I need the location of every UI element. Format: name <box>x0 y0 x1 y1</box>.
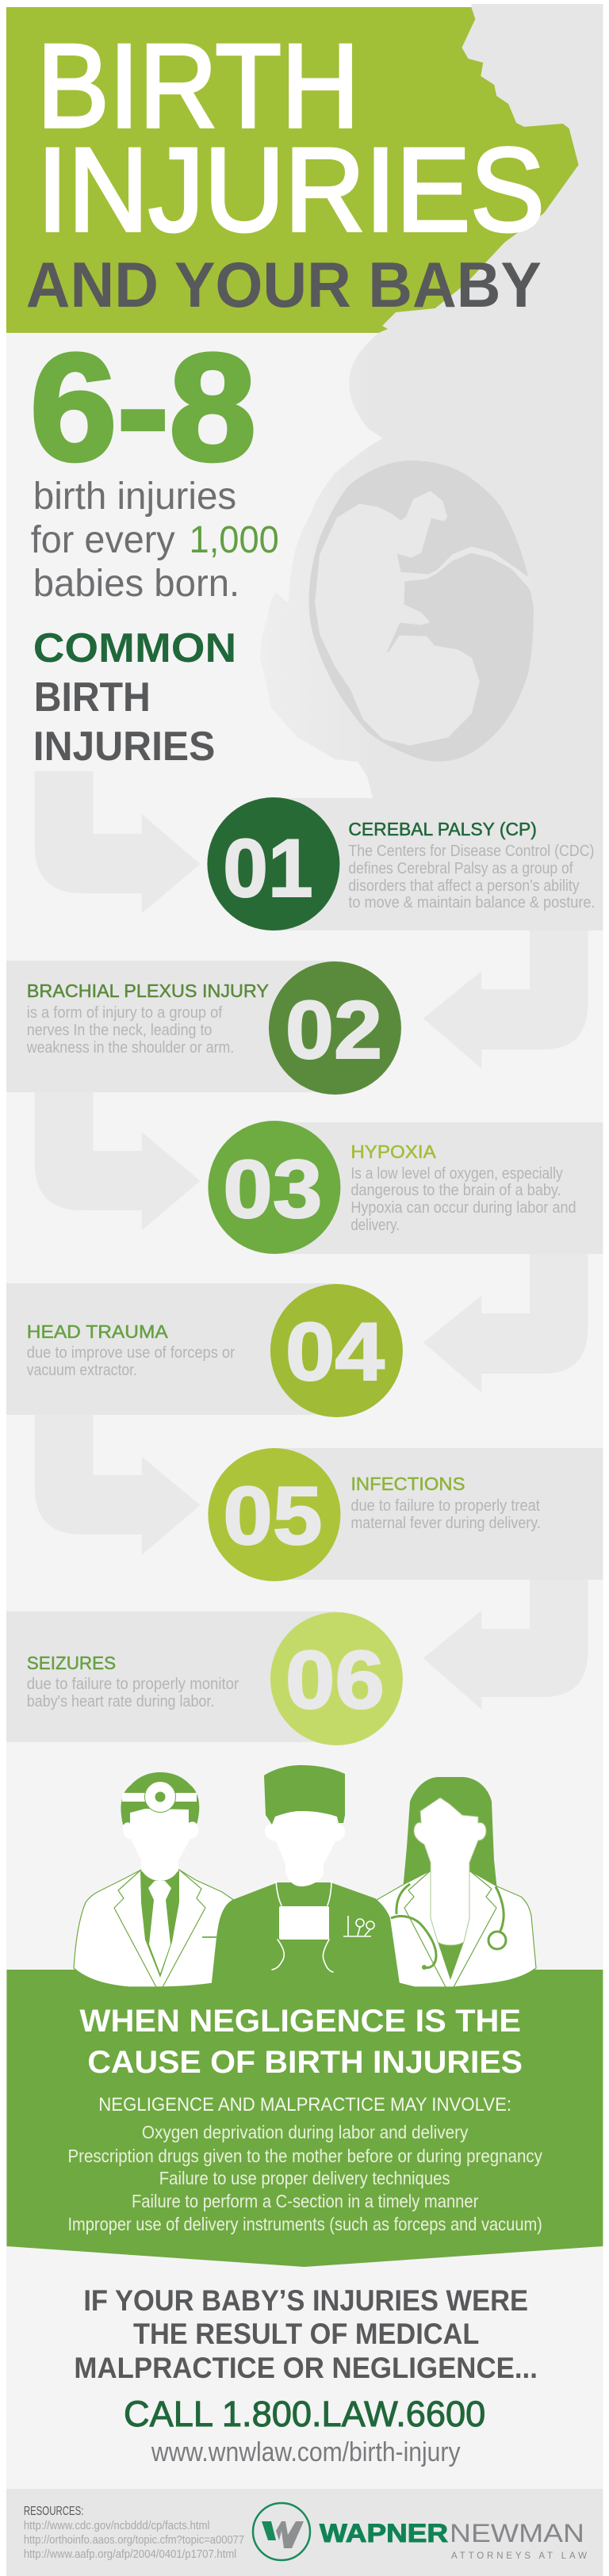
panel: brachial plexus injury: nerves In the neck, leading to <box>27 1022 212 1039</box>
call to action text <box>74 2284 538 2384</box>
heading: when negligence: CAUSE OF BIRTH INJURIES <box>87 2045 523 2080</box>
panel: hypoxia: 03 <box>223 1143 323 1235</box>
panel: hypoxia: HYPOXIA <box>350 1141 436 1162</box>
title: BIRTH <box>37 20 359 152</box>
nurse with stethoscope <box>377 1777 536 1987</box>
panel: brachial plexus injury: 02 <box>285 984 382 1076</box>
panel: head trauma: vacuum extractor. <box>27 1362 137 1379</box>
negligence list: Improper use of delivery instruments (such as forceps and vacuum) <box>67 2214 542 2234</box>
footer band <box>6 2489 603 2576</box>
resources <box>24 2505 244 2561</box>
statistic caption: 1,000 <box>190 519 279 561</box>
panel: infections: INFECTIONS <box>350 1473 465 1494</box>
panel: infections: maternal fever during delivery. <box>350 1515 541 1532</box>
arrow 5 <box>35 1415 200 1555</box>
panel: head trauma: 04 <box>285 1305 385 1397</box>
arrow 4 <box>423 1254 588 1393</box>
panel: hypoxia: Hypoxia can occur during labor and <box>350 1199 576 1217</box>
title <box>26 20 545 321</box>
panel: cerebral palsy: CEREBAL PALSY (CP) <box>348 819 537 839</box>
heading: when negligence <box>79 2004 523 2080</box>
heading: common birth injuries: BIRTH <box>34 674 151 720</box>
call to action text: MALPRACTICE OR NEGLIGENCE... <box>74 2352 538 2384</box>
heading: common birth injuries <box>33 625 236 769</box>
panel: infections: due to failure to properly treat <box>350 1497 540 1515</box>
arrow 6 <box>423 1580 588 1710</box>
icon: fetus <box>316 491 532 745</box>
panel: hypoxia: delivery. <box>350 1217 400 1234</box>
panel: hypoxia <box>208 1121 603 1254</box>
panel: infections: 05 <box>223 1470 323 1561</box>
panel: brachial plexus injury <box>6 961 401 1095</box>
statistic caption: birth injuries <box>33 476 236 518</box>
panel: brachial plexus injury: weakness in the shoulder or arm. <box>26 1039 234 1057</box>
panel: seizures: baby's heart rate during labor. <box>27 1693 214 1710</box>
heading: common birth injuries: INJURIES <box>33 723 215 769</box>
negligence list: Failure to use proper delivery techniques <box>159 2168 450 2188</box>
panel: cerebral palsy: defines Cerebral Palsy as a group of <box>348 860 573 877</box>
illustration: medical staff <box>74 1765 536 1989</box>
panel: brachial plexus injury: BRACHIAL PLEXUS INJURY <box>27 980 269 1001</box>
resources: http://orthoinfo.aaos.org/topic.cfm?topic=a00077 <box>24 2533 244 2547</box>
header green banner <box>6 7 582 333</box>
logo: Wapner Newman: WAPNER <box>320 2519 448 2547</box>
panel: hypoxia: Is a low level of oxygen, especially <box>350 1165 563 1183</box>
arrow 3 <box>35 1092 200 1230</box>
website: www.wnwlaw.com/birth-injury <box>151 2437 461 2467</box>
call to action text: IF YOUR BABY’S INJURIES WERE <box>83 2284 528 2317</box>
panel: head trauma: HEAD TRAUMA <box>27 1321 168 1342</box>
call to action text: THE RESULT OF MEDICAL <box>133 2318 479 2350</box>
statistic caption <box>31 476 279 605</box>
panel: seizures <box>6 1611 403 1745</box>
surgeon in scrubs <box>211 1765 400 1989</box>
icon: womb <box>309 461 534 762</box>
panel: seizures: SEIZURES <box>27 1653 116 1673</box>
panel: brachial plexus injury: is a form of injury to a group of <box>27 1004 223 1022</box>
panel: cerebral palsy <box>207 797 603 931</box>
panel: seizures: due to failure to properly monitor <box>27 1676 239 1693</box>
resources: http://www.aafp.org/afp/2004/0401/p1707.html <box>24 2547 236 2561</box>
subheading: negligence and malpractice: NEGLIGENCE AND MALPRACTICE MAY INVOLVE: <box>98 2094 511 2115</box>
logo: Wapner Newman: ATTORNEYS AT LAW <box>451 2551 587 2561</box>
resources: RESOURCES: <box>24 2505 83 2518</box>
title: AND YOUR BABY <box>26 250 542 321</box>
panel: seizures: 06 <box>285 1634 385 1726</box>
resources: http://www.cdc.gov/ncbddd/cp/facts.html <box>24 2519 209 2532</box>
panel: head trauma <box>6 1283 403 1417</box>
pregnant woman silhouette <box>260 4 603 798</box>
panel: head trauma: due to improve use of forceps or <box>27 1344 236 1362</box>
panel: negligence background <box>6 1970 603 2267</box>
heading: common birth injuries: COMMON <box>33 625 236 671</box>
negligence list <box>67 2122 542 2234</box>
statistic caption: for every <box>31 519 175 561</box>
panel: cerebral palsy: disorders that affect a person's ability <box>348 877 580 895</box>
logo: Wapner Newman <box>253 2503 587 2561</box>
heading: when negligence: WHEN NEGLIGENCE IS THE <box>79 2004 521 2039</box>
title: INJURIES <box>37 124 545 256</box>
negligence list: Oxygen deprivation during labor and delivery <box>142 2122 469 2142</box>
phone number: CALL 1.800.LAW.6600 <box>124 2394 485 2434</box>
arrow 2 <box>423 931 588 1068</box>
statistic caption: babies born. <box>33 563 239 605</box>
panel: hypoxia: dangerous to the brain of a baby. <box>350 1182 561 1199</box>
panel: infections <box>208 1448 603 1581</box>
negligence list: Failure to perform a C-section in a timely manner <box>132 2191 479 2211</box>
statistic 6-8: 6-8 <box>30 322 256 492</box>
negligence list: Prescription drugs given to the mother before or during pregnancy <box>67 2146 542 2166</box>
arrow 1 <box>35 771 200 913</box>
logo: Wapner Newman: NEWMAN <box>450 2519 584 2547</box>
panel: cerebral palsy: 01 <box>223 822 313 914</box>
doctor with head mirror <box>74 1772 235 1987</box>
